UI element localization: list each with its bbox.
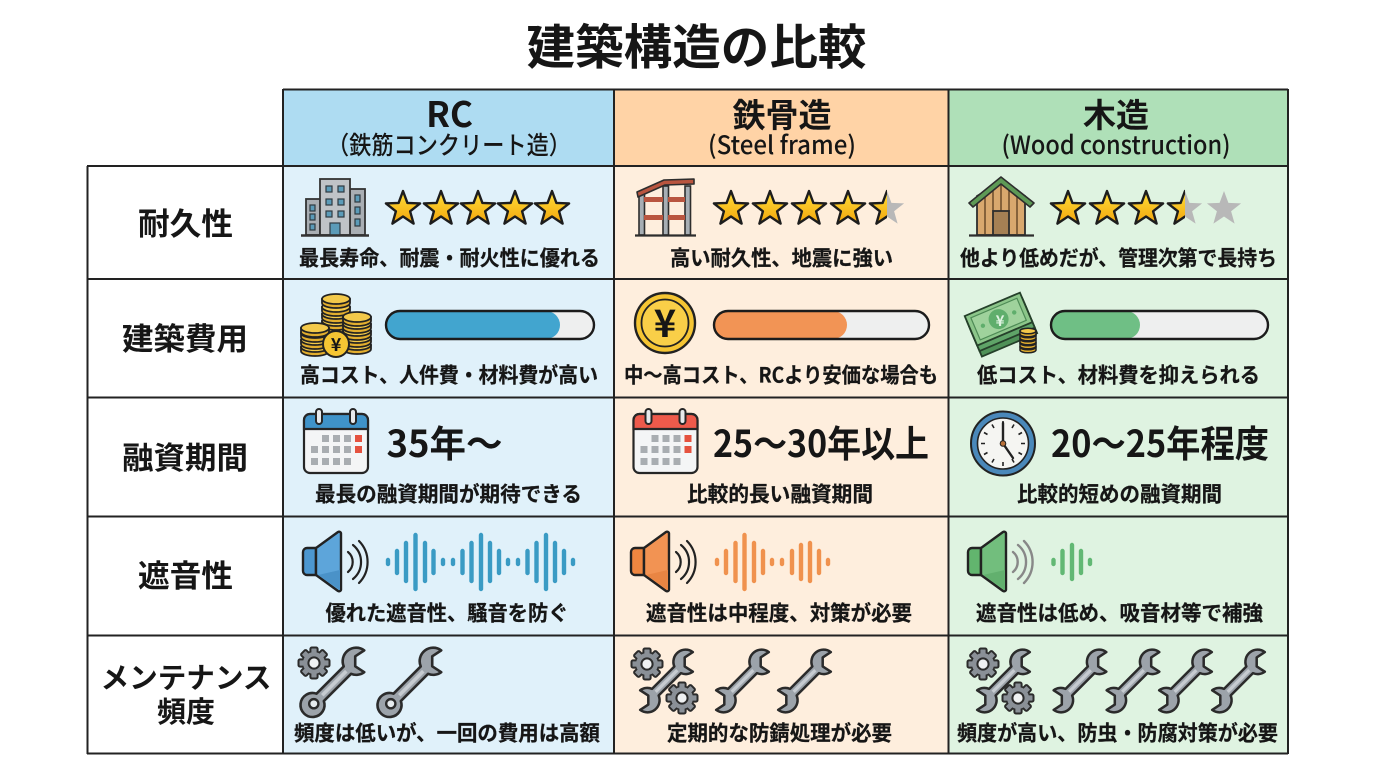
header: RC: （鉄筋コンクリート造） bbox=[327, 126, 571, 162]
caption: RC loan period: 最長の融資期間が期待できる bbox=[315, 478, 582, 508]
header: wood: 木造 bbox=[1083, 89, 1149, 137]
header: steel frame: (Steel frame) bbox=[708, 126, 856, 162]
icon: yen coin bbox=[635, 293, 695, 353]
icons: steel gears and three wrenches bbox=[630, 645, 841, 717]
panel: RC column background bbox=[283, 89, 614, 753]
header: wood: (Wood construction) bbox=[1002, 126, 1230, 162]
icon: banknotes and coins: ¥ bbox=[996, 310, 1005, 331]
value: wood loan period: 20〜25年程度 bbox=[1051, 414, 1269, 468]
value: RC loan period: 35年〜 bbox=[386, 414, 502, 468]
row label: maintenance frequency: メンテナンス bbox=[100, 655, 272, 697]
caption: RC durability: 最長寿命、耐震・耐火性に優れる bbox=[299, 242, 600, 272]
icon: steel frame bbox=[635, 179, 696, 236]
row label: construction cost: 建築費用 bbox=[122, 314, 248, 359]
row label: sound insulation: 遮音性 bbox=[138, 551, 233, 596]
bar: RC cost bbox=[386, 311, 594, 339]
header: RC bbox=[327, 87, 571, 162]
caption: wood cost: 低コスト、材料費を抑えられる bbox=[977, 360, 1260, 390]
caption: wood sound insulation: 遮音性は低め、吸音材等で補強 bbox=[976, 598, 1263, 628]
row label: loan period: 融資期間 bbox=[122, 433, 248, 478]
row label: maintenance frequency bbox=[100, 655, 272, 731]
icon: RC speaker bbox=[303, 532, 368, 591]
icon: wood house bbox=[969, 177, 1034, 236]
icons: wood gears and five wrenches bbox=[967, 645, 1275, 717]
bar: wood cost bbox=[1051, 311, 1268, 339]
waveform: wood bbox=[1054, 545, 1090, 579]
row label: durability: 耐久性 bbox=[138, 199, 233, 244]
stars: wood three and a half bbox=[1051, 191, 1241, 224]
table grid lines bbox=[87, 89, 1288, 754]
caption: steel loan period: 比較的長い融資期間 bbox=[687, 478, 873, 508]
caption: steel maintenance: 定期的な防錆処理が必要 bbox=[667, 718, 892, 748]
waveform: RC bbox=[388, 535, 573, 589]
icon: RC building bbox=[301, 179, 369, 236]
caption: wood maintenance: 頻度が高い、防虫・防腐対策が必要 bbox=[957, 718, 1278, 748]
icon: wood speaker bbox=[968, 532, 1033, 591]
icon: clock bbox=[971, 412, 1035, 476]
panel: wood column background bbox=[948, 89, 1288, 753]
icon: steel speaker bbox=[631, 532, 696, 591]
row label: maintenance frequency: 頻度 bbox=[157, 689, 215, 731]
header: steel frame: 鉄骨造 bbox=[732, 89, 832, 137]
waveform: steel bbox=[717, 535, 828, 589]
caption: steel durability: 高い耐久性、地震に強い bbox=[670, 242, 893, 272]
icon: RC coin stacks: ¥ bbox=[331, 331, 342, 357]
caption: RC maintenance: 頻度は低いが、一回の費用は高額 bbox=[294, 718, 600, 748]
icon: RC calendar bbox=[304, 409, 368, 473]
header: RC: RC bbox=[426, 87, 473, 138]
value: steel loan period: 25〜30年以上 bbox=[713, 414, 929, 468]
panel: steel column background bbox=[614, 89, 948, 753]
caption: steel cost: 中〜高コスト、RCより安価な場合も bbox=[624, 360, 938, 390]
icon: banknotes and coins bbox=[965, 293, 1037, 357]
bar: steel cost bbox=[714, 311, 929, 339]
caption: RC cost: 高コスト、人件費・材料費が高い bbox=[300, 360, 598, 390]
icons: RC gear and two wrenches bbox=[294, 642, 452, 723]
icon: steel calendar bbox=[634, 409, 698, 473]
icon: yen coin: ¥ bbox=[654, 293, 676, 348]
stars: steel four and a half bbox=[714, 191, 904, 224]
title: 建築構造の比較 bbox=[526, 8, 866, 78]
header: steel frame bbox=[708, 89, 856, 162]
icon: RC coin stacks bbox=[301, 294, 371, 357]
caption: steel sound insulation: 遮音性は中程度、対策が必要 bbox=[646, 598, 912, 628]
header: wood bbox=[1002, 89, 1230, 162]
caption: wood loan period: 比較的短めの融資期間 bbox=[1017, 478, 1222, 508]
caption: RC sound insulation: 優れた遮音性、騒音を防ぐ bbox=[326, 598, 568, 628]
stars: RC five bbox=[386, 191, 569, 224]
caption: wood durability: 他より低めだが、管理次第で長持ち bbox=[960, 242, 1277, 272]
